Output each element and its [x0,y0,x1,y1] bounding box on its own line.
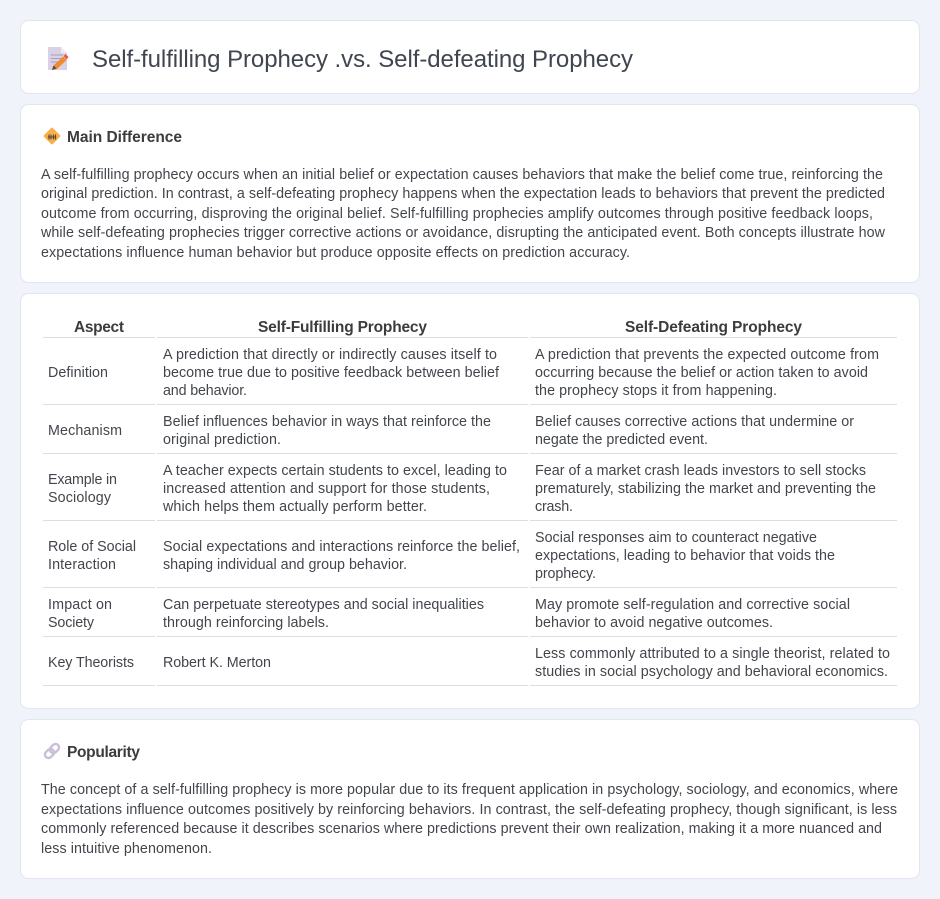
row: example in sociology: Fear of a market crash leads investors to sell stocks [535,463,866,479]
row: role of social interaction: prophecy. [535,566,596,582]
table header: Self-Defeating Prophecy [625,319,802,336]
row: role of social interaction: Interaction [48,557,116,573]
row: example in sociology: A teacher expects certain students to excel, leading to [163,463,507,479]
row: definition: become true due to positive feedback between belief [163,365,499,381]
row: example in sociology: Example in [48,472,117,488]
row: role of social interaction: shaping individual and group behavior. [163,557,407,573]
title: Self-fulfilling Prophecy .vs. Self-defeating Prophecy [92,46,633,73]
row: mechanism: negate the predicted event. [535,432,708,448]
text block: popularity [41,782,898,857]
icon: chain link [43,742,61,760]
panel: comparison table [20,294,920,708]
icon: warning diamond [43,127,61,145]
row: impact on society: Impact on [48,597,112,613]
row: impact on society: Society [48,615,95,631]
row: key theorists: Robert K. Merton [163,655,271,671]
row: example in sociology: increased attention and support for those students, [163,481,490,497]
row: example in sociology: prematurely, stabilizing the market and preventing the [535,481,876,497]
row: definition: the prophecy stops it from happening. [535,383,777,399]
row: definition: and behavior. [163,383,247,399]
text block: popularity: The concept of a self-fulfilling prophecy is more popular due to its frequent application in psychology, sociology, and economics, where [41,782,898,798]
row: definition [48,347,879,399]
table header: Aspect [74,319,124,336]
row: role of social interaction: expectations, leading to behavior that voids the [535,548,835,564]
text block: main difference: original prediction. In contrast, a self-defeating prophecy happens when the expectation leads to behaviors that prevent the predicted [41,186,885,202]
row: mechanism: Mechanism [48,423,122,439]
text block: main difference: outcome from occurring, disproving the original belief. Self-fulfilling prophecies amplify outcomes through positive feedback loops, [41,206,873,222]
row: key theorists: studies in social psychology and behavioral economics. [535,664,888,680]
text block: popularity: expectations influence outcomes positively by reinforcing behaviors. In contrast, the self-defeating prophecy, though significant, is less [41,802,897,818]
text block: main difference: expectations influence human behavior but produce opposite effects on prediction accuracy. [41,245,630,261]
panel: popularity [20,720,920,878]
row: definition: A prediction that prevents the expected outcome from [535,347,879,363]
panel: title card [20,20,920,94]
text block: main difference: A self-fulfilling prophecy occurs when an initial belief or expectation causes behaviors that make the belief come true, reinforcing the [41,167,883,183]
row: mechanism: Belief influences behavior in ways that reinforce the [163,414,491,430]
row: role of social interaction: Social responses aim to counteract negative [535,530,817,546]
row: example in sociology: crash. [535,499,573,515]
text block: main difference: while self-defeating prophecies trigger corrective actions or avoidance, disrupting the anticipated event. Both concepts illustrate how [40,225,886,241]
row: mechanism [48,414,854,448]
row: definition: occurring because the belief or action taken to avoid [535,365,868,381]
icon: document with pencil [48,47,68,70]
row: role of social interaction: Social expectations and interactions reinforce the belief, [163,539,520,555]
row: impact on society: May promote self-regulation and corrective social [535,597,850,613]
table header [74,319,802,336]
text block: main difference [40,167,886,261]
row: key theorists: Less commonly attributed to a single theorist, related to [535,646,890,662]
row: impact on society: behavior to avoid negative outcomes. [535,615,773,631]
row: impact on society: through reinforcing labels. [163,615,329,631]
text block: popularity: less intuitive phenomenon. [41,841,212,857]
row: example in sociology [48,463,876,515]
row: role of social interaction [48,530,835,582]
row: definition: Definition [48,365,108,381]
row: example in sociology: Sociology [48,490,112,506]
row: example in sociology: which helps them actually perform better. [162,499,427,515]
row: mechanism: Belief causes corrective actions that undermine or [535,414,854,430]
row: key theorists [48,646,890,680]
row: key theorists: Key Theorists [48,655,134,671]
row: impact on society [48,597,850,631]
row: mechanism: original prediction. [163,432,281,448]
heading: main difference: Main Difference [67,129,182,146]
table header: Self-Fulfilling Prophecy [258,319,427,336]
panel: main difference [20,104,920,282]
row: impact on society: Can perpetuate stereotypes and social inequalities [163,597,484,613]
row: definition: A prediction that directly or indirectly causes itself to [163,347,497,363]
row: role of social interaction: Role of Social [48,539,136,555]
text block: popularity: commonly referenced because it describes scenarios where predictions prevent their own realization, making it a more nuanced and [41,821,882,837]
heading: popularity: Popularity [67,744,140,761]
